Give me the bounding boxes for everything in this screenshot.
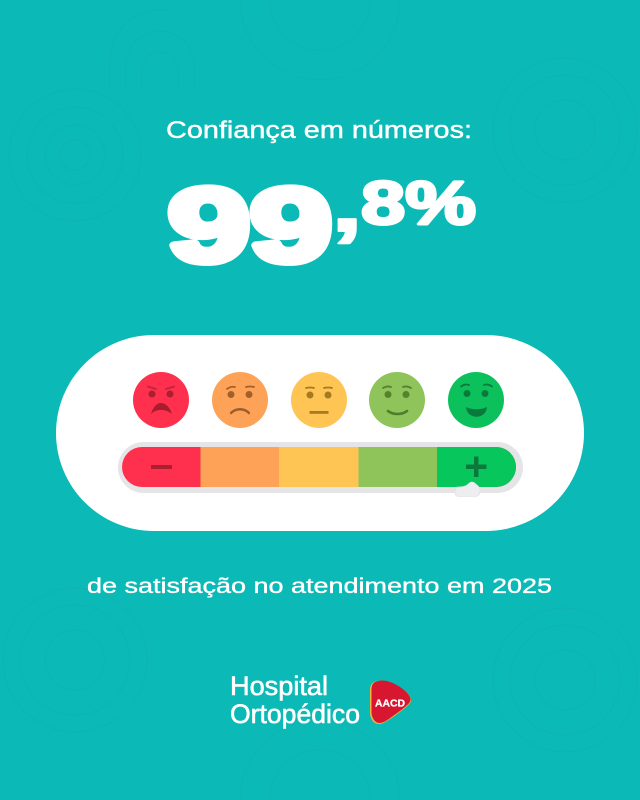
- big number: 99,8%: 99: [168, 168, 332, 284]
- icon: very happy face: [448, 372, 504, 428]
- logo wordmark: [230, 671, 360, 729]
- icon: very unhappy face: [133, 372, 189, 428]
- icon: happy face: [369, 372, 425, 428]
- slider handle: [455, 482, 480, 496]
- logo mark: AACD: AACD: [375, 698, 405, 710]
- icon: plus: [466, 456, 486, 477]
- icon: minus: [151, 465, 172, 469]
- panel: satisfaction scale: [56, 335, 584, 531]
- icon: unhappy face: [212, 372, 268, 428]
- heading: Confiança em números: Confiança em números:: [166, 117, 472, 144]
- logo wordmark: Hospital: [230, 671, 328, 701]
- slider bar: [118, 442, 523, 496]
- big number: 99,8%: 8%: [361, 169, 476, 237]
- logo wordmark: Ortopédico: [230, 699, 360, 729]
- caption: satisfaction in 2025: de satisfação no atendimento em 2025: [87, 575, 552, 598]
- logo: Hospital Ortopédico AACD: [230, 671, 411, 729]
- icon: neutral face: [291, 372, 347, 428]
- big number: 99,8%: ,: [331, 159, 363, 248]
- big number: 99,8%: [168, 159, 476, 284]
- logo mark: AACD: [370, 680, 411, 724]
